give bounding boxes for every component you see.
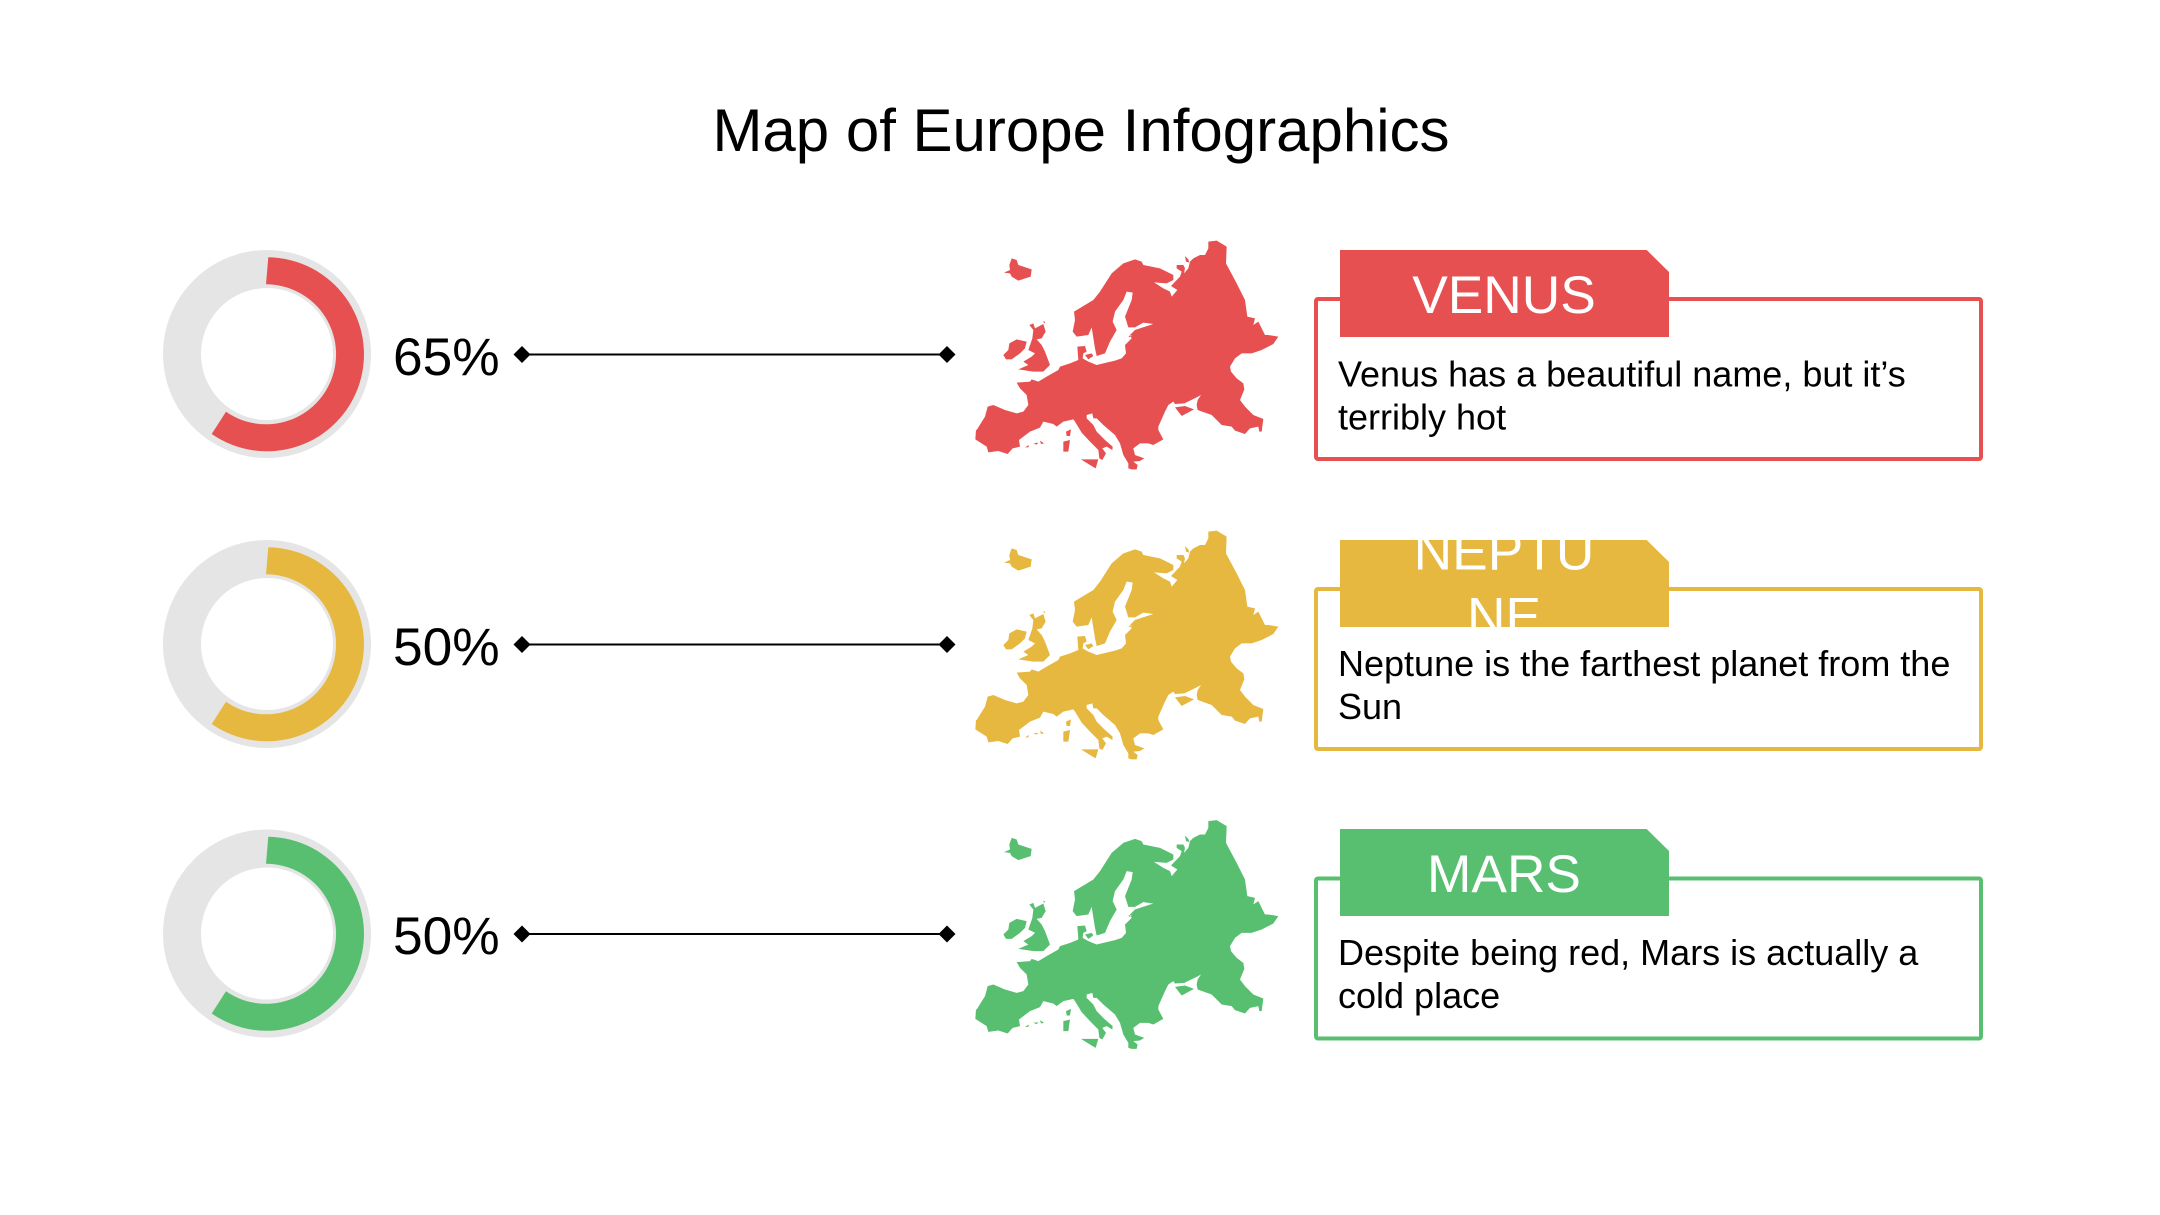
tab: MARS — [1340, 829, 1669, 916]
map of Europe — [975, 241, 1278, 469]
donut chart: 50% — [182, 837, 364, 1031]
description text: terribly hot — [1338, 396, 1506, 438]
tab: NEPTUNE: NEPTU — [1414, 522, 1594, 582]
title: Map of Europe Infographics — [712, 97, 1450, 164]
description box — [1316, 878, 1981, 1038]
map of Europe — [975, 820, 1278, 1049]
description box — [1316, 299, 1981, 459]
row: Venus — [182, 241, 1981, 469]
description box — [1316, 589, 1981, 749]
tab: VENUS — [1340, 250, 1669, 337]
row: Neptune — [182, 522, 1981, 759]
connector arrow — [514, 346, 956, 363]
connector arrow — [514, 636, 956, 653]
percentage label: 65% — [393, 328, 500, 387]
description text: Neptune is the farthest planet from the — [1338, 643, 1950, 684]
description text: Sun — [1338, 686, 1402, 727]
row: Mars — [182, 820, 1981, 1049]
donut chart: 50% — [182, 547, 364, 741]
percentage label: 50% — [393, 618, 500, 677]
tab: VENUS: VENUS — [1412, 266, 1596, 325]
description text: Despite being red, Mars is actually a — [1338, 932, 1919, 973]
map of Europe — [975, 531, 1278, 759]
description text: cold place — [1338, 975, 1500, 1016]
description text: Venus has a beautiful name, but it’s — [1338, 354, 1906, 394]
tab: NEPTUNE: NE — [1467, 588, 1541, 646]
tab: MARS: MARS — [1427, 845, 1581, 904]
connector arrow — [514, 926, 956, 942]
donut chart: 65% — [182, 257, 364, 451]
tab: NEPTUNE — [1340, 540, 1669, 627]
percentage label: 50% — [393, 907, 500, 966]
